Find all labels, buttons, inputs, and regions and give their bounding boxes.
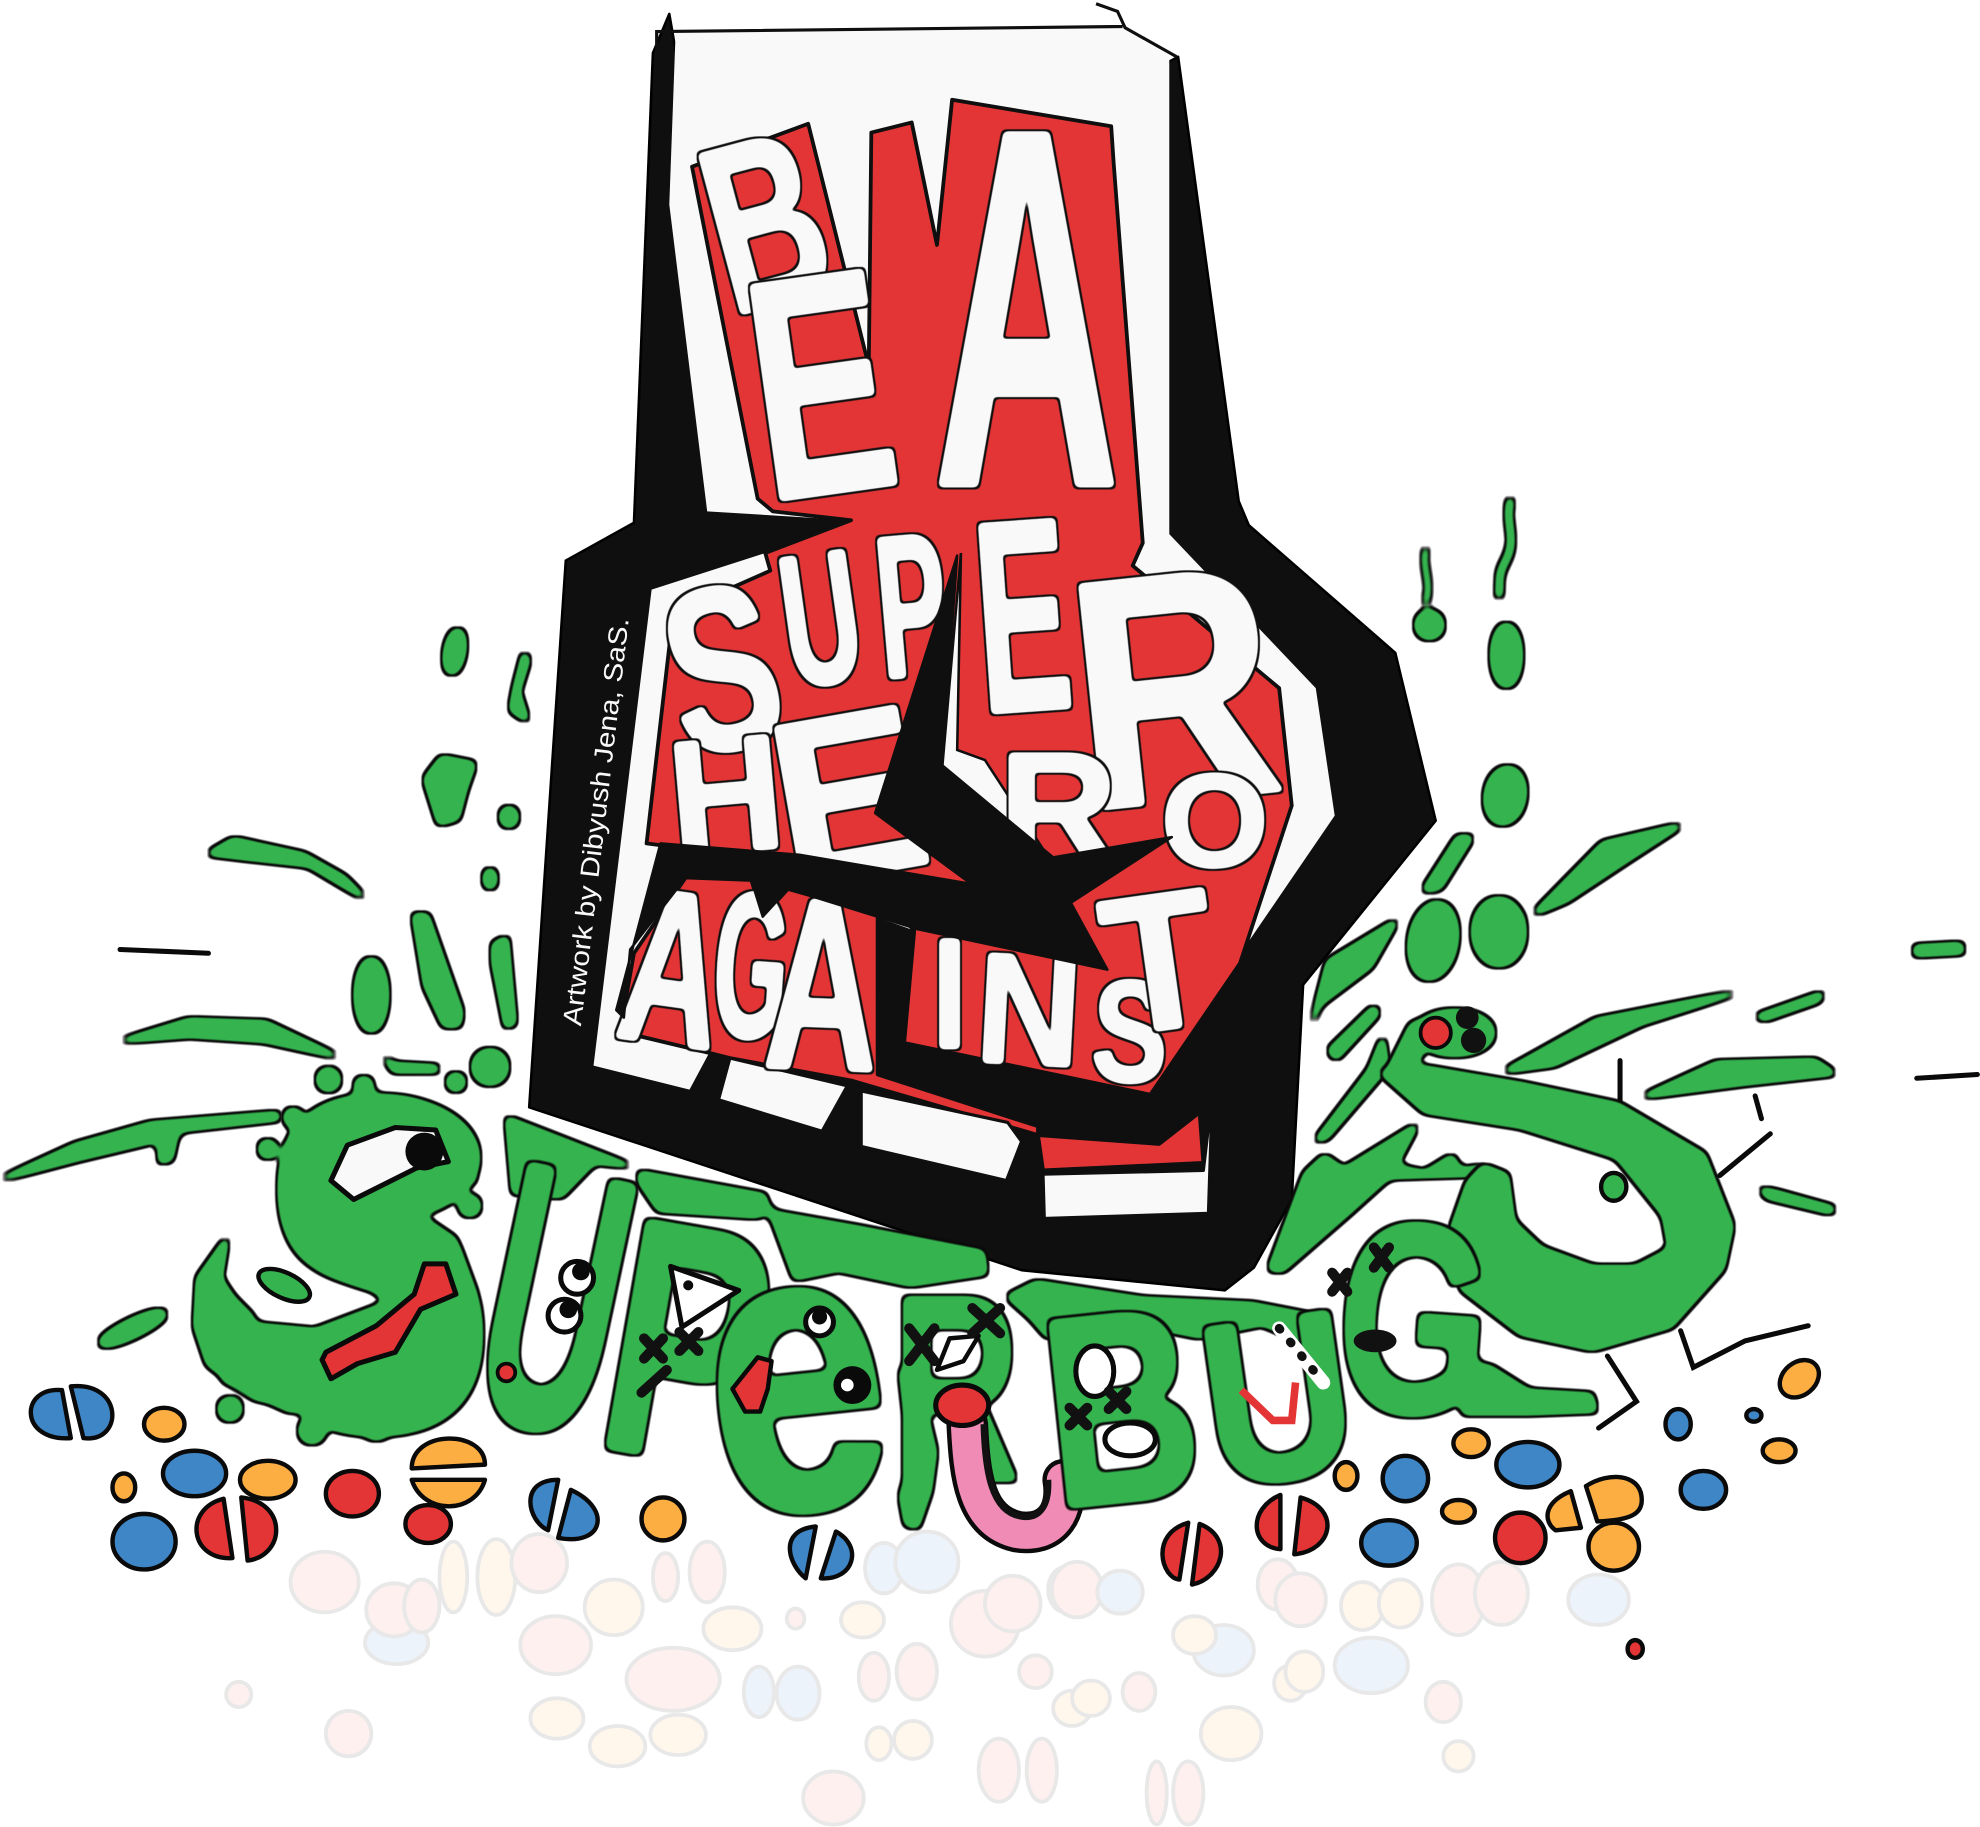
artwork credit: Artwork by Dibyush Jena, SaS. (557, 616, 635, 1027)
heading: AGAINST: A (760, 845, 884, 1124)
heading: AGAINST: T (1089, 846, 1230, 1078)
heading: BE A: A (933, 23, 1120, 596)
letter P with dead eyes: P (579, 1148, 797, 1542)
faded reflected pills (226, 1532, 1629, 1824)
heading: SUPERHERO: E (751, 653, 946, 937)
fist silhouette (529, 4, 1436, 1290)
heading: SUPERHERO: S (641, 529, 803, 808)
heading: AGAINST (606, 840, 1230, 1124)
black star overlay (616, 556, 1172, 1074)
green splatter (4, 496, 1962, 1354)
letter B with white eyes: B (1029, 1248, 1213, 1566)
heading: AGAINST: N (972, 920, 1086, 1101)
heading: SUPERHERO: H (661, 699, 791, 892)
letter G (1328, 1164, 1595, 1476)
letter E with eyes and red lip: e (682, 1135, 908, 1603)
letter R with tongue: R (892, 1240, 1020, 1537)
heading: AGAINST: A (606, 840, 740, 1098)
heading: AGAINST: S (1088, 948, 1172, 1115)
creature: S-shaped bug (1383, 1006, 1731, 1348)
heading: SUPERHERO: P (867, 490, 956, 723)
heading: BE A: B (676, 78, 855, 367)
letter U with eyes: U (448, 1083, 664, 1518)
letter G: G (1328, 1164, 1501, 1476)
heading: SUPERHERO: E (966, 461, 1080, 773)
heading: SUPERHERO: R (999, 720, 1117, 897)
antibiotic pills (31, 1352, 1826, 1658)
heading: BE A (676, 23, 1120, 596)
heading: SUPERHERO: U (768, 508, 874, 729)
thin black strokes (120, 949, 1977, 1428)
heading: AGAINST: G (706, 849, 796, 1085)
heading: SUPERHERO: O (1161, 746, 1269, 895)
heading: SUPERHERO: R (1053, 495, 1296, 881)
letter U second: U (1185, 1259, 1370, 1538)
heading: AGAINST: I (932, 907, 967, 1082)
heading: BE A: E (727, 200, 914, 569)
heading: SUPERHERO (641, 461, 1296, 937)
letter S with eye and tongue: S (258, 1000, 494, 1529)
